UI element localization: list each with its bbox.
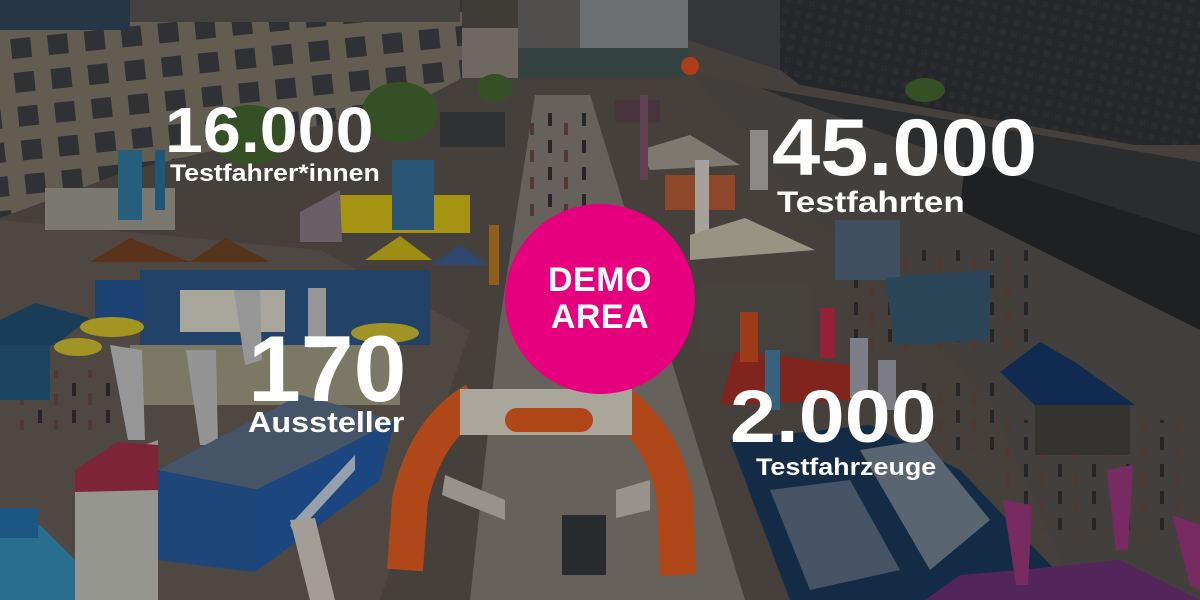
number: 16.000 bbox=[165, 94, 373, 166]
central walkway bbox=[470, 95, 745, 600]
right dark building bbox=[688, 0, 1200, 600]
stat: 45.000 test rides bbox=[772, 103, 1037, 219]
label: Testfahrten bbox=[777, 186, 965, 219]
trees bbox=[210, 74, 945, 165]
number: 45.000 bbox=[772, 103, 1037, 193]
orange arch bbox=[405, 400, 678, 575]
label: Testfahrzeuge bbox=[756, 454, 936, 481]
stat: 16.000 test riders bbox=[165, 94, 380, 187]
number: 170 bbox=[248, 316, 406, 421]
badge text: DEMO bbox=[548, 261, 652, 299]
upper walkway booths bbox=[440, 57, 768, 235]
label: Aussteller bbox=[248, 407, 404, 439]
left plaza bbox=[0, 220, 470, 600]
left building bbox=[0, 0, 688, 218]
F12 pillar and bottom-left tents bbox=[0, 440, 158, 600]
left tents and stands bbox=[0, 150, 499, 445]
stat: 2.000 test vehicles bbox=[730, 375, 936, 481]
blue shimano container bbox=[158, 395, 395, 600]
number: 2.000 bbox=[730, 375, 936, 458]
badge text bbox=[548, 261, 652, 336]
badge text: AREA bbox=[551, 298, 649, 336]
label: Testfahrer*innen bbox=[170, 160, 380, 187]
right tents bbox=[690, 218, 1200, 600]
badge: demo area circle bbox=[505, 204, 695, 394]
crowd bbox=[10, 110, 1180, 530]
stat: 170 exhibitors bbox=[248, 316, 406, 439]
